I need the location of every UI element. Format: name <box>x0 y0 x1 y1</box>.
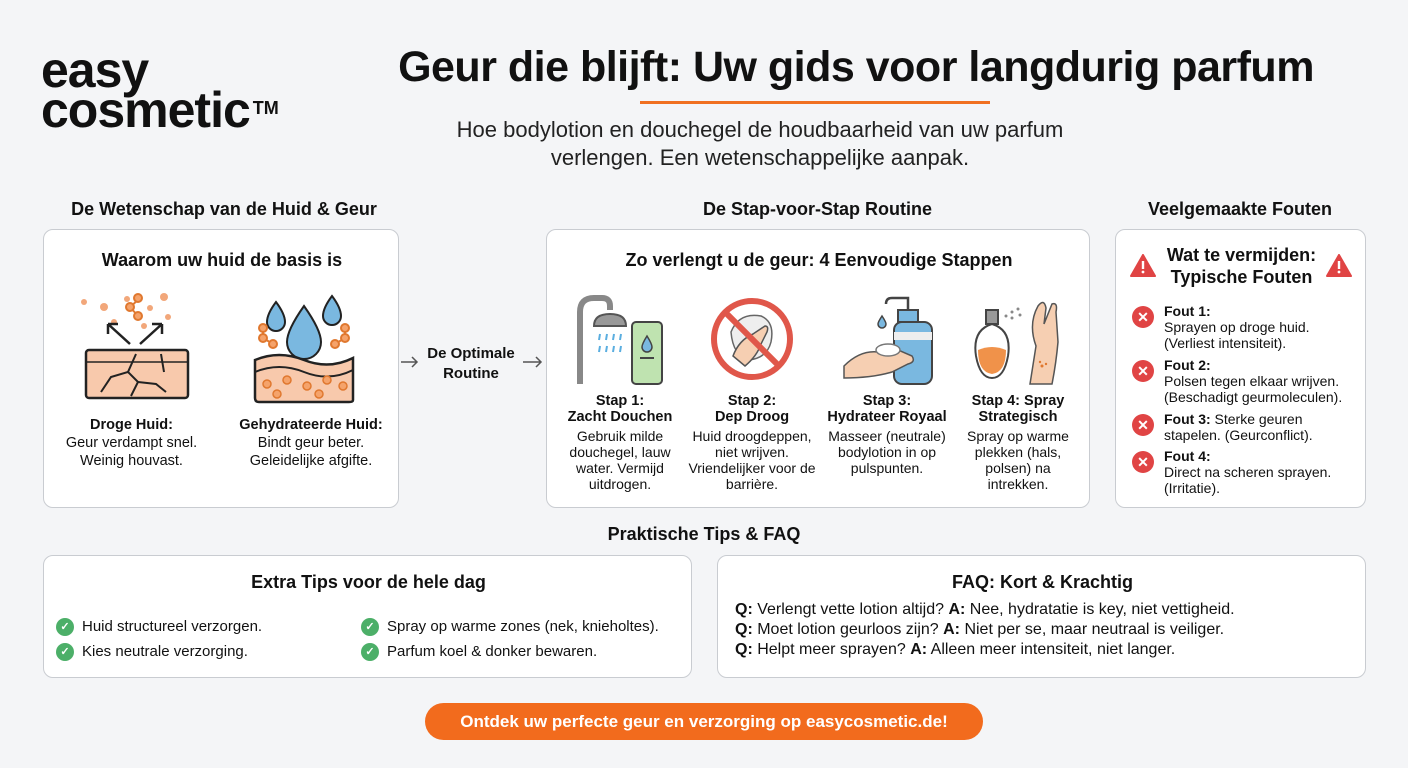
mistake 3 <box>1132 411 1313 443</box>
text: hydrated skin: Bindt geur beter. <box>258 435 364 451</box>
mistake 1: (Verliest intensiteit). <box>1164 335 1286 351</box>
panel heading: Wat te vermijden: Typische Fouten <box>1167 245 1316 287</box>
mistake 2: (Beschadigt geurmoleculen). <box>1164 389 1342 405</box>
step 2 <box>688 393 816 492</box>
step 1: Stap 1: <box>596 393 644 409</box>
cta button <box>425 703 983 740</box>
icon: perfume spray <box>974 302 1059 385</box>
icon: hydrated skin <box>254 294 354 404</box>
mistake 1 <box>1132 303 1310 351</box>
icon: warning right <box>1326 254 1352 277</box>
tips list: ✓ <box>365 646 375 658</box>
text: hydrated skin <box>239 417 383 469</box>
step 4 <box>967 393 1069 492</box>
mistake 4: (Irritatie). <box>1164 480 1220 496</box>
subtitle: verlengen. Een wetenschappelijke aanpak. <box>551 145 969 170</box>
faq list: Q: Verlengt vette lotion altijd? A: Nee, hydratatie is key, niet vettigheid. <box>735 601 1235 618</box>
tips list: ✓ <box>60 621 70 633</box>
faq list: Q: Moet lotion geurloos zijn? A: Niet per se, maar neutraal is veiliger. <box>735 621 1224 638</box>
title: Geur die blijft: Uw gids voor langdurig parfum <box>398 43 1314 91</box>
arrow: optimal routine: De Optimale Routine <box>427 345 515 382</box>
mistake 4: Direct na scheren sprayen. <box>1164 464 1331 480</box>
tips list: Kies neutrale verzorging. <box>82 643 248 660</box>
text: dry skin: Geur verdampt snel. <box>66 435 197 451</box>
tips list: Huid structureel verzorgen. <box>82 618 262 635</box>
panel heading: Extra Tips voor de hele dag <box>251 572 486 592</box>
title underline <box>640 101 990 104</box>
icon: warning left <box>1130 254 1156 277</box>
section heading: tips & faq: Praktische Tips & FAQ <box>608 524 800 544</box>
step 2: Stap 2: <box>728 393 776 409</box>
step 3 <box>827 393 947 476</box>
mistake 3: stapelen. (Geurconflict). <box>1164 427 1313 443</box>
icon: lotion <box>843 296 933 385</box>
logo: easy <box>41 42 148 98</box>
mistake 1: ✕ <box>1137 309 1149 325</box>
subtitle: Hoe bodylotion en douchegel de houdbaarheid van uw parfum <box>457 117 1063 142</box>
mistake 2: Polsen tegen elkaar wrijven. <box>1164 373 1339 389</box>
section heading: mistakes: Veelgemaakte Fouten <box>1148 199 1332 219</box>
subtitle <box>457 117 1063 170</box>
panel heading: FAQ: Kort & Krachtig <box>952 572 1133 592</box>
panel: routine <box>546 229 1090 508</box>
mistake 4 <box>1132 448 1331 496</box>
panel: skin science <box>43 229 399 508</box>
tips list <box>56 618 659 661</box>
panel: extra tips <box>43 555 692 678</box>
tips list: ✓ <box>365 621 375 633</box>
step 4: Stap 4: Spray <box>972 393 1064 409</box>
panel heading: Waarom uw huid de basis is <box>102 250 342 270</box>
step 2: Huid droogdeppen, niet wrijven. Vriendelijker voor de barrière. <box>688 428 816 492</box>
logo <box>41 42 279 138</box>
mistake 2: Fout 2: <box>1164 357 1211 373</box>
step 2: Dep Droog <box>715 409 789 425</box>
mistake 1: Fout 1: <box>1164 303 1211 319</box>
mistake 4: ✕ <box>1137 454 1149 470</box>
icon: shower <box>577 295 663 385</box>
tips list: ✓ <box>60 646 70 658</box>
section heading: routine: De Stap-voor-Stap Routine <box>703 199 932 219</box>
mistake 1: Sprayen op droge huid. <box>1164 319 1310 335</box>
panel heading: Zo verlengt u de geur: 4 Eenvoudige Stappen <box>625 250 1013 270</box>
panel: mistakes <box>1115 229 1366 508</box>
arrow: optimal routine <box>401 345 542 382</box>
section heading: science: De Wetenschap van de Huid & Geur <box>71 199 377 219</box>
step 3: Hydrateer Royaal <box>827 409 947 425</box>
step 3: Masseer (neutrale) bodylotion in op pulspunten. <box>828 428 946 476</box>
icon: no rubbing <box>711 298 793 380</box>
icon: dry skin <box>81 293 190 400</box>
text: dry skin <box>66 417 197 469</box>
text: dry skin: Droge Huid: <box>90 417 173 433</box>
step 4: Strategisch <box>978 409 1057 425</box>
text: hydrated skin: Geleidelijke afgifte. <box>250 453 372 469</box>
logo: cosmeticTM <box>41 82 279 138</box>
step 4: Spray op warme plekken (hals, polsen) na intrekken. <box>967 428 1069 492</box>
tips list: Parfum koel & donker bewaren. <box>387 643 597 660</box>
mistake 2: ✕ <box>1137 363 1149 379</box>
mistake 3: Fout 3: Sterke geuren <box>1164 411 1302 427</box>
faq list: Q: Helpt meer sprayen? A: Alleen meer intensiteit, niet langer. <box>735 641 1175 658</box>
step 1: Zacht Douchen <box>568 409 672 425</box>
panel: faq <box>717 555 1366 678</box>
text: dry skin: Weinig houvast. <box>80 453 183 469</box>
text: hydrated skin: Gehydrateerde Huid: <box>239 417 383 433</box>
step 1 <box>568 393 672 492</box>
faq list <box>735 601 1235 658</box>
step 1: Gebruik milde douchegel, lauw water. Vermijd uitdrogen. <box>569 428 671 492</box>
mistake 2 <box>1132 357 1342 405</box>
mistake 3: ✕ <box>1137 417 1149 433</box>
mistake 4: Fout 4: <box>1164 448 1211 464</box>
tips list: Spray op warme zones (nek, knieholtes). <box>387 618 659 635</box>
step 3: Stap 3: <box>863 393 911 409</box>
cta button: Ontdek uw perfecte geur en verzorging op easycosmetic.de! <box>460 712 948 731</box>
